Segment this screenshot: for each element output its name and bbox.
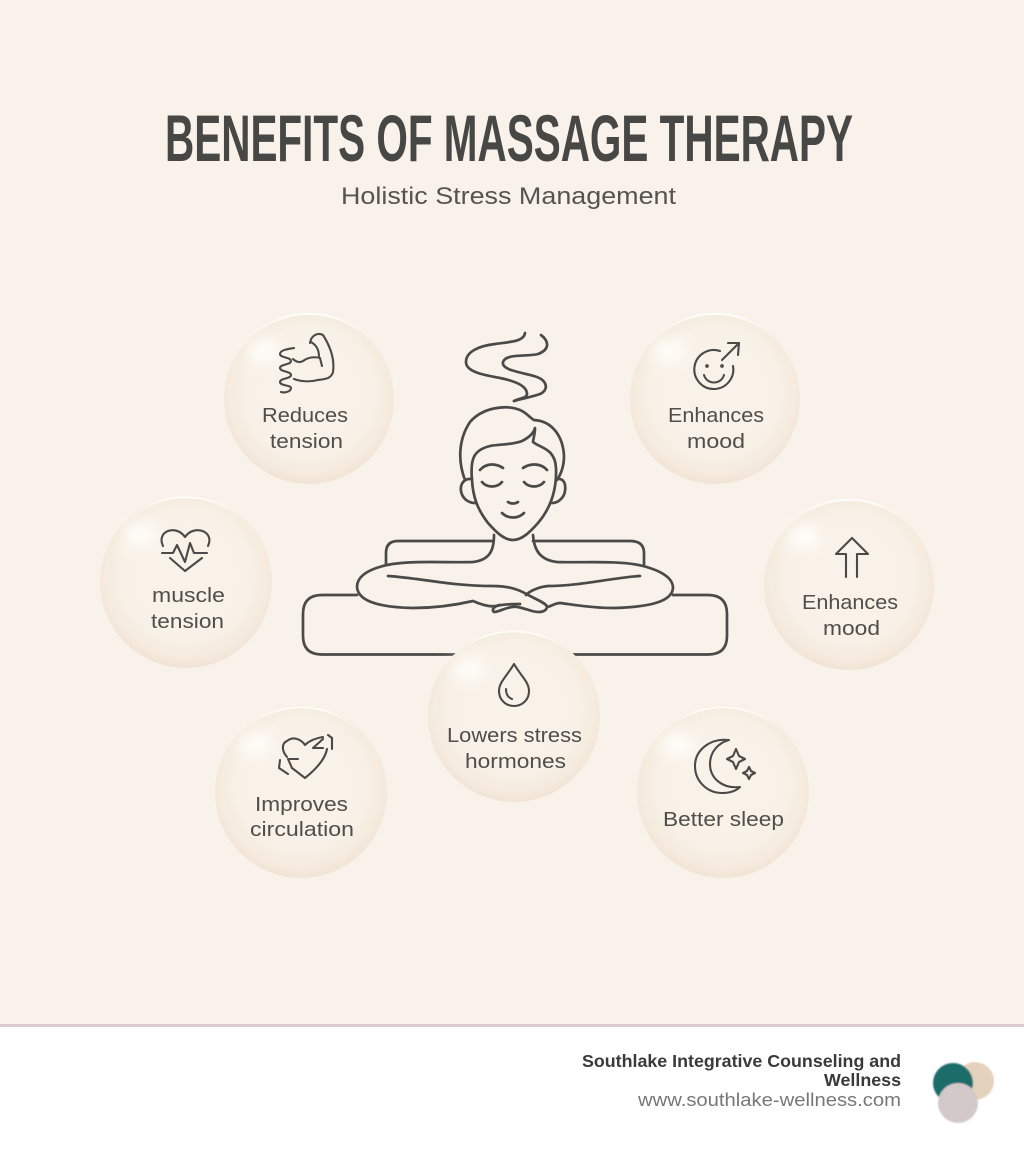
label (447, 724, 582, 773)
bubble: enhances mood (smile) (630, 314, 800, 484)
bubble: reduces tension (224, 314, 394, 484)
label: hormones (465, 750, 566, 773)
sphere (637, 706, 809, 878)
bubble: muscle tension (100, 496, 272, 668)
label (151, 584, 225, 633)
steam (466, 333, 547, 401)
bubble: better sleep (637, 706, 809, 878)
organization name: Wellness (824, 1070, 901, 1090)
label (668, 404, 764, 453)
label: Reduces (262, 404, 348, 427)
label: tension (151, 610, 224, 633)
label: Enhances (802, 591, 898, 614)
label: circulation (250, 818, 354, 841)
label: mood (687, 430, 745, 453)
bubble: lowers stress hormones (428, 630, 600, 802)
arms and shoulders (357, 535, 673, 612)
central figure: relaxing person (303, 333, 727, 654)
footer (0, 1024, 1024, 1154)
footer divider (0, 1024, 1024, 1027)
sphere (630, 314, 800, 484)
website: www.southlake-wellness.com (637, 1089, 901, 1110)
label: Improves (255, 793, 348, 816)
icon: moon and stars (695, 740, 755, 793)
back pillow (386, 541, 644, 566)
label: mood (823, 617, 880, 640)
logo (933, 1062, 994, 1123)
label: Better sleep (663, 808, 784, 831)
head (460, 407, 565, 540)
bubble: improves circulation (215, 706, 387, 878)
massage table (303, 595, 727, 654)
bubble: enhances mood (arrow) (764, 500, 934, 670)
icon: up arrow (836, 538, 868, 577)
organization name (582, 1051, 901, 1090)
sphere (100, 496, 272, 668)
icon: water drop (499, 664, 529, 706)
organization name: Southlake Integrative Counseling and (582, 1051, 901, 1071)
icon: heart with cycle arrows (279, 735, 332, 778)
label: Lowers stress (447, 724, 582, 747)
sphere (764, 500, 934, 670)
label (802, 591, 898, 640)
label (250, 793, 354, 841)
sphere (224, 314, 394, 484)
icon: smile with arrow (694, 343, 739, 389)
label: tension (270, 430, 343, 453)
sphere (215, 706, 387, 878)
subtitle: Holistic Stress Management (341, 183, 676, 210)
icon: heart with pulse (162, 530, 209, 571)
label (262, 404, 348, 453)
label: Enhances (668, 404, 764, 427)
label: muscle (152, 584, 225, 607)
sphere (428, 630, 600, 802)
icon: flexed muscle (280, 334, 333, 392)
footer band (0, 1024, 1024, 1154)
